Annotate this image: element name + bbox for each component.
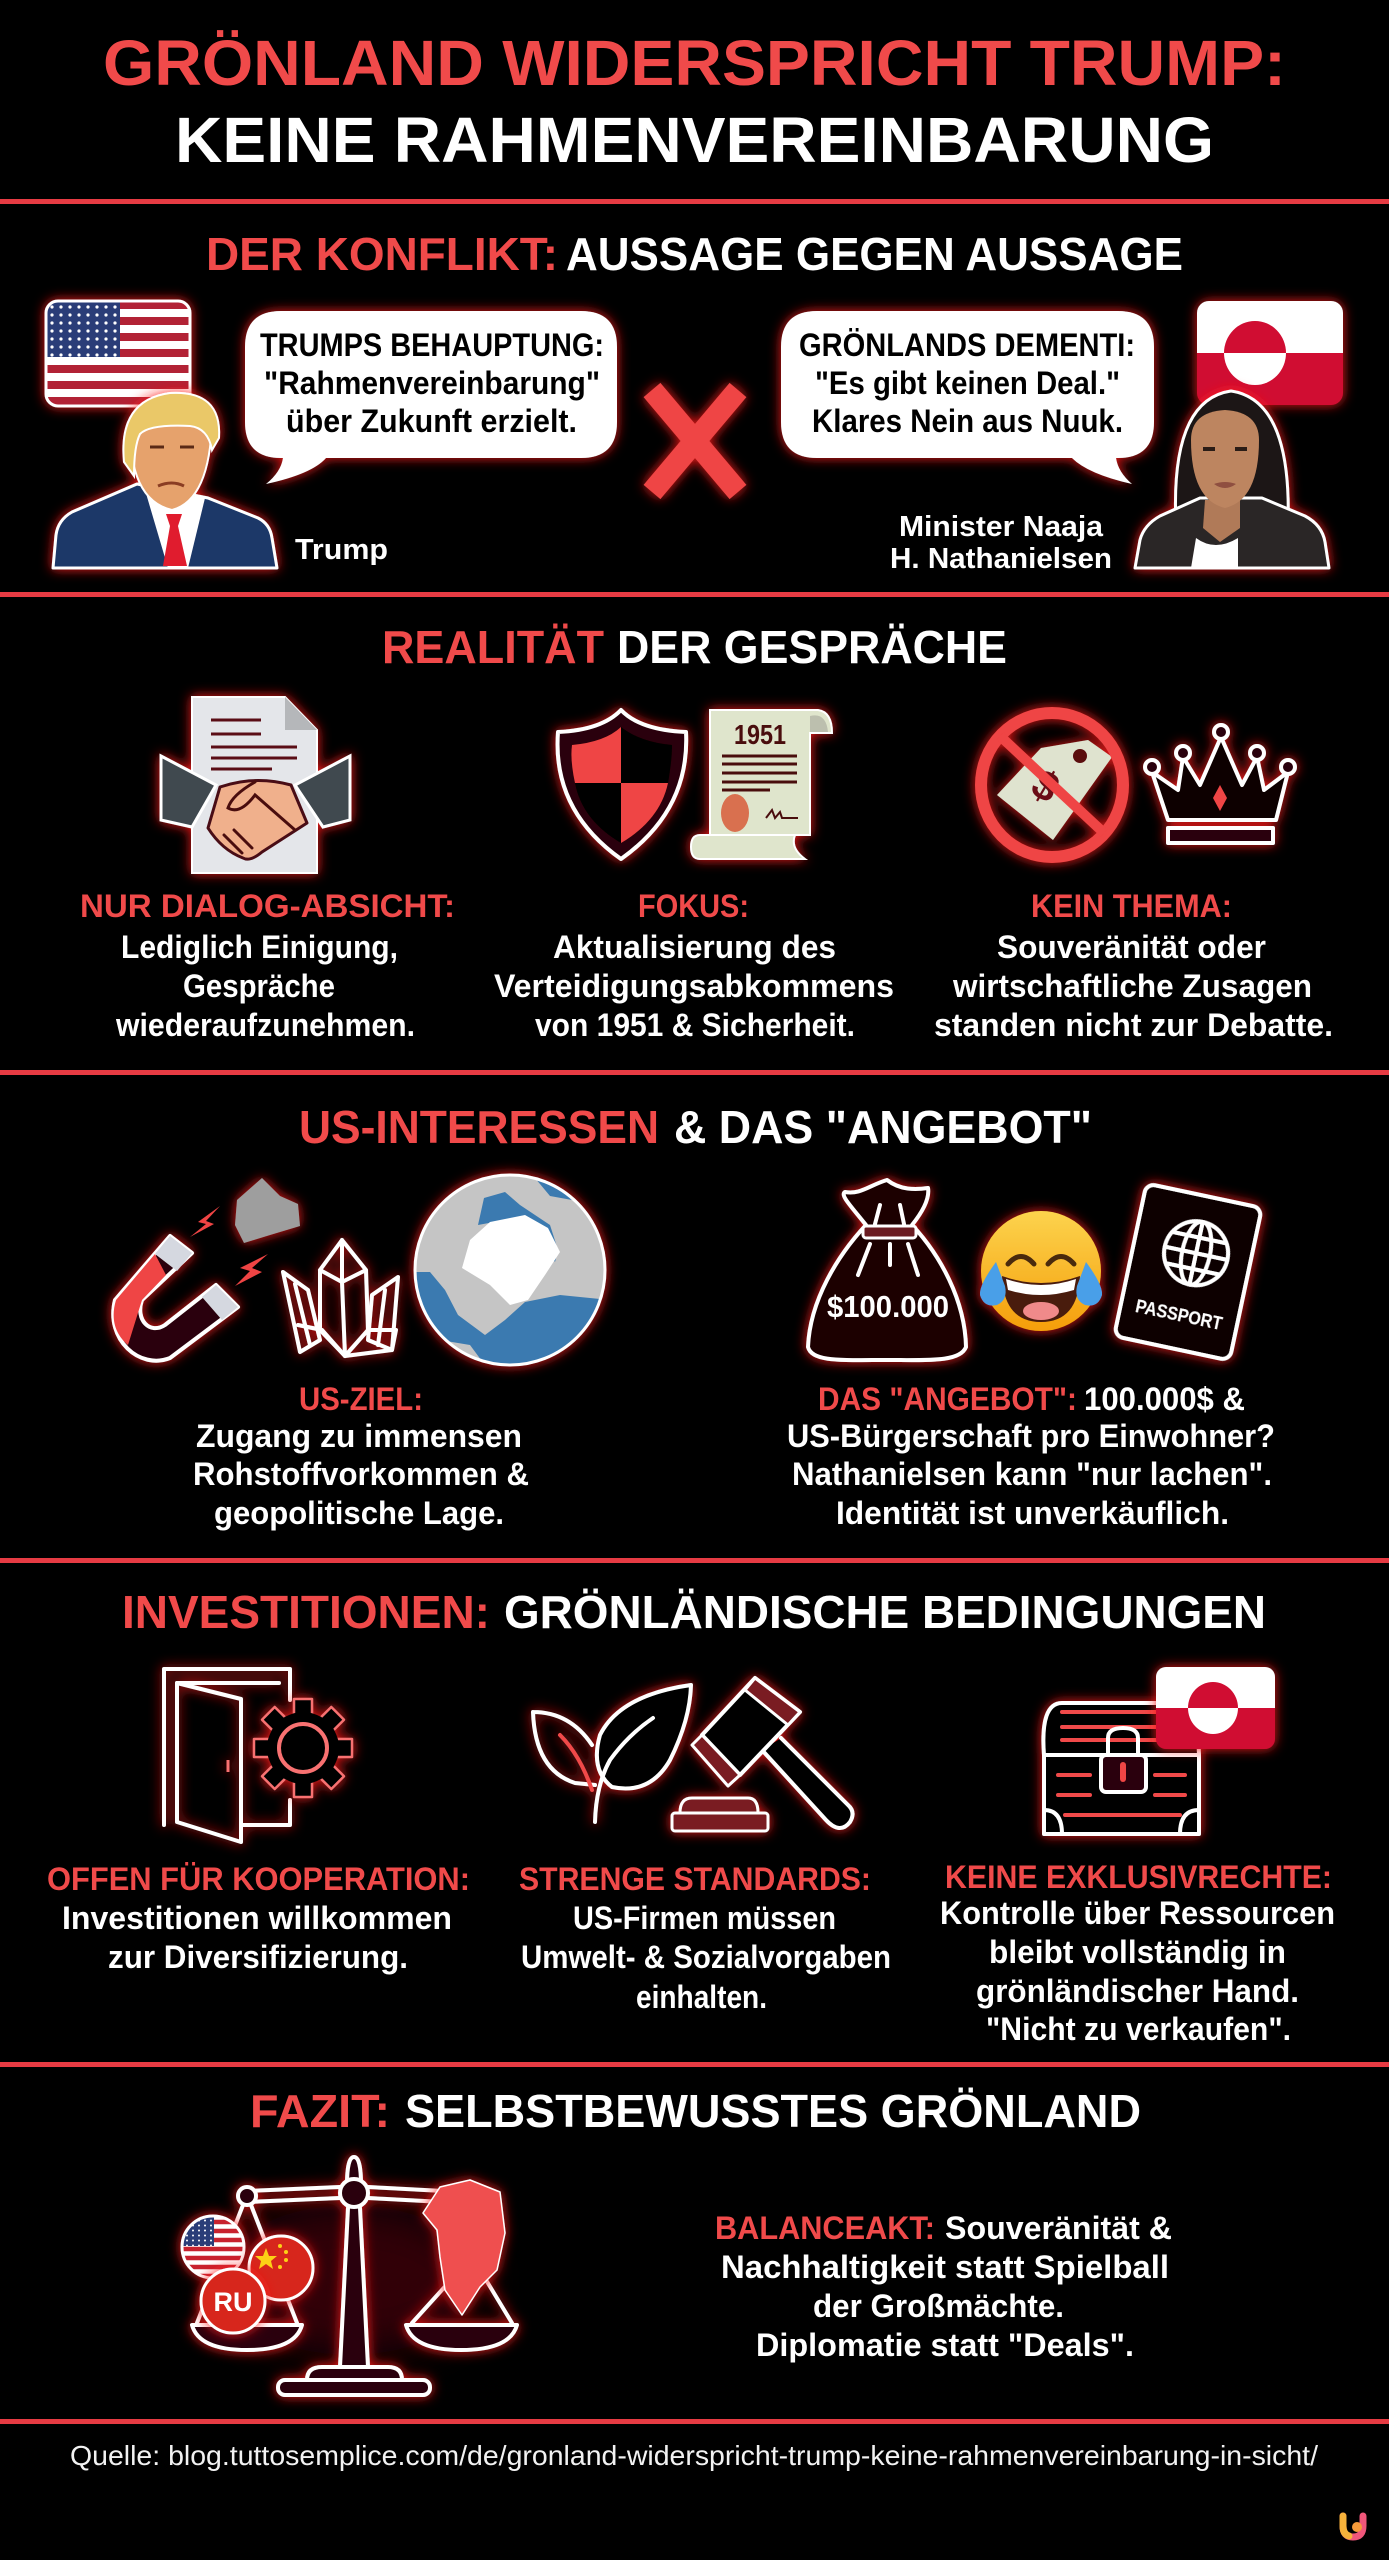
callout: Trumps Behauptung: TRUMPS BEHAUPTUNG: bbox=[260, 327, 604, 363]
icon: no price tag: $ bbox=[1024, 760, 1068, 812]
text: US-Ziel: Rohstoffvorkommen & bbox=[193, 1456, 529, 1492]
text: Standards bbox=[519, 1861, 891, 2015]
text: US-Ziel bbox=[193, 1381, 529, 1531]
icon: red X bbox=[652, 390, 738, 492]
text: Balanceakt: Nachhaltigkeit statt Spielball bbox=[721, 2249, 1169, 2285]
icon: Greenland flag small bbox=[1156, 1667, 1275, 1749]
text: Kein Thema: Souveränität oder bbox=[997, 929, 1266, 965]
figure: Trump bbox=[53, 393, 277, 568]
text: Offen bbox=[47, 1861, 470, 1975]
text: Dialog: NUR DIALOG-ABSICHT: bbox=[80, 888, 455, 924]
text: Standards: STRENGE STANDARDS: bbox=[519, 1861, 871, 1897]
label: Trump: Trump bbox=[295, 534, 388, 566]
text: Balanceakt: Diplomatie statt "Deals". bbox=[756, 2327, 1134, 2363]
callout: Grönlands Dementi bbox=[781, 311, 1154, 484]
icon: gear bbox=[254, 1699, 352, 1797]
icon: gavel bbox=[672, 1678, 853, 1831]
text: Exklusivrechte: KEINE EXKLUSIVRECHTE: bbox=[945, 1859, 1332, 1895]
icon: rock bbox=[235, 1178, 300, 1243]
icon: treasure chest bbox=[1043, 1703, 1199, 1834]
heading: US-Interessen: US-INTERESSEN bbox=[299, 1101, 659, 1153]
heading: Fazit: SELBSTBEWUSSTES GRÖNLAND bbox=[405, 2085, 1141, 2137]
icon: laughing emoji bbox=[980, 1211, 1102, 1331]
icon: passport bbox=[1114, 1183, 1262, 1361]
text: Standards: einhalten. bbox=[636, 1979, 767, 2015]
panel: Investitionen bbox=[47, 1586, 1335, 2047]
label: Minister bbox=[890, 511, 1112, 575]
text: Balanceakt bbox=[715, 2210, 1172, 2363]
text: Dialog bbox=[80, 888, 455, 1043]
icon: open door bbox=[164, 1669, 290, 1842]
heading: US-Interessen bbox=[299, 1101, 1092, 1153]
icon: passport: PASSPORT bbox=[1134, 1296, 1224, 1334]
text: Fokus: von 1951 & Sicherheit. bbox=[535, 1007, 855, 1043]
text: Balanceakt: BALANCEAKT: bbox=[715, 2210, 935, 2246]
title: KEINE RAHMENVEREINBARUNG bbox=[175, 104, 1214, 176]
callout: Grönlands Dementi: Klares Nein aus Nuuk. bbox=[812, 403, 1123, 439]
icon: crown bbox=[1145, 725, 1295, 843]
source line: Quelle: blog.tuttosemplice.com/de/gronland-widerspricht-trump-keine-rahmenvereinbarung-in-sicht/ bbox=[70, 2440, 1318, 2471]
text: Kein Thema: KEIN THEMA: bbox=[1031, 888, 1232, 924]
icon: money bag bbox=[808, 1180, 966, 1360]
text: das Angebot: Nathanielsen kann "nur lachen". bbox=[792, 1456, 1272, 1492]
text: Offen: zur Diversifizierung. bbox=[108, 1939, 408, 1975]
label: Minister: Minister Naaja bbox=[899, 511, 1104, 543]
icon: 1951 treaty scroll bbox=[691, 710, 832, 859]
text: Fokus: FOKUS: bbox=[638, 888, 749, 924]
panel: der Konflikt bbox=[46, 228, 1343, 575]
text: Standards: US-Firmen müssen bbox=[573, 1900, 836, 1936]
label: Minister: H. Nathanielsen bbox=[890, 543, 1112, 575]
heading: der Konflikt: DER KONFLIKT: bbox=[206, 228, 558, 280]
icon: Greenland flag bbox=[1197, 301, 1343, 405]
text: Dialog: Lediglich Einigung, bbox=[121, 929, 398, 965]
heading: Investitionen bbox=[122, 1586, 1266, 1638]
text: Dialog: Gespräche bbox=[183, 968, 335, 1004]
text: Kein Thema: standen nicht zur Debatte. bbox=[934, 1007, 1333, 1043]
text: Fokus: Aktualisierung des bbox=[553, 929, 836, 965]
icon: crystals bbox=[283, 1240, 398, 1356]
figure: Minister Nathanielsen bbox=[1135, 391, 1329, 568]
panel: Fazit bbox=[182, 2085, 1172, 2395]
icon: RU circle: RU bbox=[214, 2287, 252, 2317]
icon: China circle bbox=[249, 2236, 313, 2300]
heading: Realität: DER GESPRÄCHE bbox=[617, 621, 1007, 673]
text: Offen: Investitionen willkommen bbox=[62, 1900, 452, 1936]
icon: 1951 treaty scroll: 1951 bbox=[734, 719, 786, 750]
icon: handshake document bbox=[161, 697, 350, 873]
text: das Angebot: DAS "ANGEBOT": bbox=[818, 1381, 1077, 1417]
heading: Investitionen: INVESTITIONEN: bbox=[122, 1586, 490, 1638]
icon: balance scale bbox=[192, 2157, 517, 2395]
panel: Realität der Gespräche bbox=[80, 621, 1333, 1043]
text: Exklusivrechte: "Nicht zu verkaufen". bbox=[986, 2011, 1291, 2047]
text: Balanceakt: Souveränität & bbox=[945, 2210, 1172, 2246]
text: Exklusivrechte: Kontrolle über Ressourcen bbox=[940, 1895, 1335, 1931]
heading: der Konflikt bbox=[206, 228, 1183, 280]
heading: Investitionen: GRÖNLÄNDISCHE BEDINGUNGEN bbox=[504, 1586, 1266, 1638]
icon: lightning bolts bbox=[190, 1206, 268, 1286]
heading: US-Interessen: & DAS "ANGEBOT" bbox=[674, 1101, 1092, 1153]
text: US-Ziel: US-ZIEL: bbox=[299, 1381, 423, 1417]
text: das Angebot: 100.000$ & bbox=[1084, 1381, 1245, 1417]
title bbox=[103, 27, 1286, 176]
callout: Trumps Behauptung bbox=[245, 311, 617, 484]
text: das Angebot: US-Bürgerschaft pro Einwohner? bbox=[787, 1418, 1275, 1454]
heading: der Konflikt: AUSSAGE GEGEN AUSSAGE bbox=[566, 228, 1183, 280]
text: das Angebot bbox=[787, 1381, 1275, 1531]
callout: Grönlands Dementi: "Es gibt keinen Deal." bbox=[815, 365, 1120, 401]
text: Dialog: wiederaufzunehmen. bbox=[115, 1007, 415, 1043]
text: US-Ziel: Zugang zu immensen bbox=[196, 1418, 522, 1454]
icon: RU circle bbox=[201, 2269, 265, 2333]
text: Balanceakt: der Großmächte. bbox=[813, 2288, 1064, 2324]
text: das Angebot: Identität ist unverkäuflich. bbox=[836, 1495, 1229, 1531]
callout: Grönlands Dementi: GRÖNLANDS DEMENTI: bbox=[799, 327, 1135, 363]
callout: Trumps Behauptung: über Zukunft erzielt. bbox=[286, 403, 577, 439]
icon: leaf bbox=[533, 1685, 691, 1822]
icon: no price tag bbox=[981, 713, 1123, 857]
icon: arctic globe bbox=[415, 1175, 610, 1372]
text: Offen: OFFEN FÜR KOOPERATION: bbox=[47, 1861, 470, 1897]
text: Exklusivrechte: grönländischer Hand. bbox=[976, 1973, 1299, 2009]
text: Kein Thema bbox=[934, 888, 1333, 1043]
text: US-Ziel: geopolitische Lage. bbox=[214, 1495, 504, 1531]
icon: US circle bbox=[182, 2216, 244, 2278]
text: Kein Thema: wirtschaftliche Zusagen bbox=[952, 968, 1312, 1004]
text: Fokus bbox=[494, 888, 894, 1043]
text: Fokus: Verteidigungsabkommens bbox=[494, 968, 894, 1004]
text: Standards: Umwelt- & Sozialvorgaben bbox=[521, 1939, 891, 1975]
panel: US-Interessen bbox=[113, 1101, 1275, 1531]
title: GRÖNLAND WIDERSPRICHT TRUMP: bbox=[103, 27, 1286, 99]
icon: money bag: $100.000 bbox=[827, 1289, 949, 1324]
logo bbox=[1343, 2516, 1363, 2537]
icon: shield bbox=[558, 710, 686, 859]
icon: magnet bbox=[113, 1236, 238, 1361]
heading: Fazit: FAZIT: bbox=[250, 2085, 390, 2137]
text: Exklusivrechte: bleibt vollständig in bbox=[989, 1934, 1286, 1970]
heading: Realität: REALITÄT bbox=[382, 621, 604, 673]
callout: Trumps Behauptung: "Rahmenvereinbarung" bbox=[264, 365, 600, 401]
text: Exklusivrechte bbox=[940, 1859, 1335, 2047]
heading: Realität bbox=[382, 621, 1007, 673]
icon: US flag bbox=[46, 301, 190, 406]
icon: Greenland map bbox=[423, 2180, 505, 2315]
